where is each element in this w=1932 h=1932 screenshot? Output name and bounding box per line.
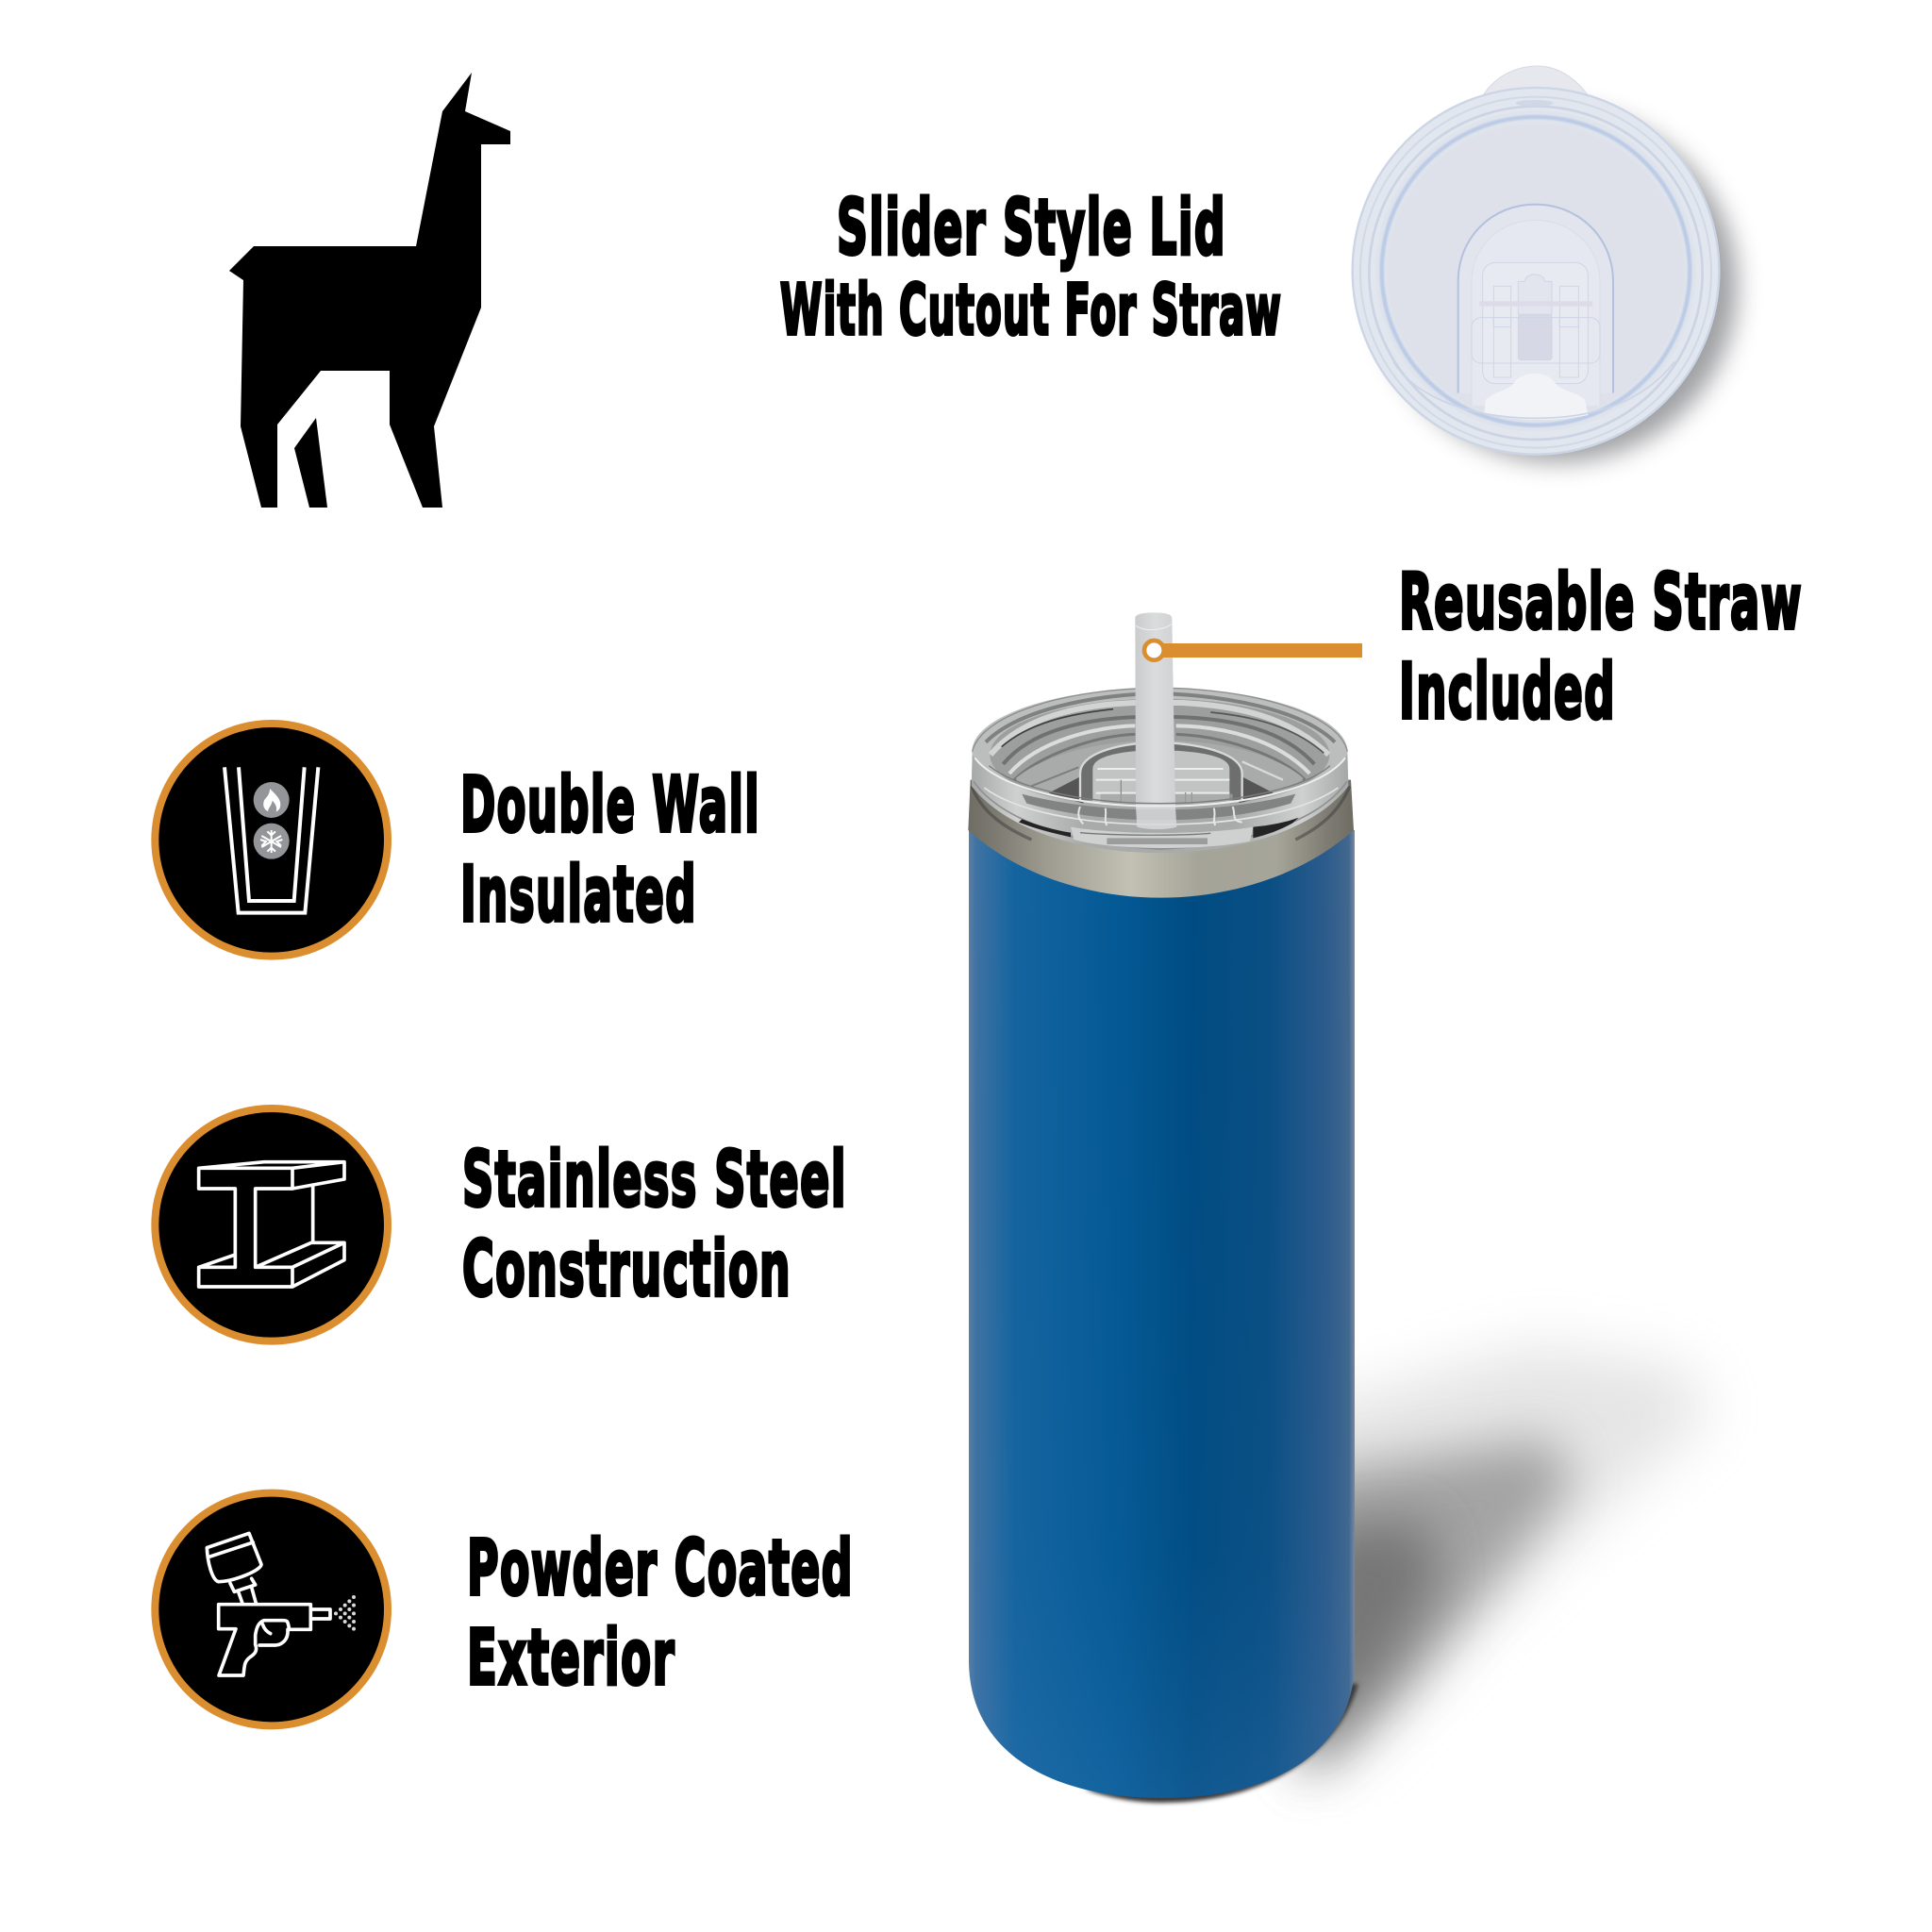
label: Construction: [462, 1225, 791, 1314]
label: [467, 1524, 854, 1703]
lid outer rim: [1352, 87, 1720, 456]
lid drop shadow: [1379, 110, 1738, 462]
feature: powder coated exterior: [155, 1493, 854, 1725]
tumbler dark base edge: [1085, 1684, 1358, 1803]
recess top arcs: [986, 693, 1335, 780]
cast shadow of tumbler: [1302, 1344, 1707, 1783]
product photo: tumbler: [968, 612, 1362, 1803]
label: Stainless Steel: [462, 1136, 847, 1224]
feature: double wall insulated: [155, 724, 760, 957]
feature: stainless steel construction: [155, 1108, 847, 1341]
icon: steel i-beam: [155, 1108, 388, 1341]
heading: slider style lid: Slider Style Lid: [837, 184, 1226, 273]
orange pointer: [1144, 641, 1362, 660]
label: Exterior: [467, 1614, 675, 1703]
callout: reusable straw: Included: [1399, 648, 1616, 737]
label: Insulated: [460, 851, 697, 940]
dark slots under lid: [1019, 819, 1071, 837]
lid slider arch: [1080, 742, 1242, 800]
slider mechanism: [1472, 262, 1600, 384]
label: [462, 1136, 847, 1314]
recess flat: [1016, 741, 1304, 808]
straw: [1135, 612, 1175, 808]
lid top notch: [1516, 100, 1554, 107]
steel band: [968, 780, 1354, 898]
label: Double Wall: [460, 761, 760, 850]
product photo: lid from above: [1352, 66, 1738, 462]
callout: reusable straw: [1399, 558, 1803, 737]
lid recess: [990, 699, 1329, 810]
front lid centre block: [1071, 827, 1253, 848]
slider arch: [1458, 205, 1613, 393]
lid rim: [972, 752, 1348, 853]
straw seen through rim: [1136, 807, 1176, 829]
icon: llama logo: [229, 73, 510, 508]
lid tab: [1483, 66, 1590, 97]
lid inner recess: [1388, 124, 1684, 421]
label: [460, 761, 760, 940]
icon: double wall cup: [155, 724, 388, 957]
lid front rim: [972, 755, 1347, 853]
label: Powder Coated: [467, 1524, 854, 1613]
heading: slider style lid: [780, 184, 1282, 351]
lid top ellipse: [972, 688, 1347, 815]
icon: spray gun: [155, 1493, 388, 1725]
heading: slider style lid: With Cutout For Straw: [780, 270, 1282, 351]
tumbler blue body: [969, 830, 1355, 1798]
slider opening: [1484, 374, 1588, 420]
